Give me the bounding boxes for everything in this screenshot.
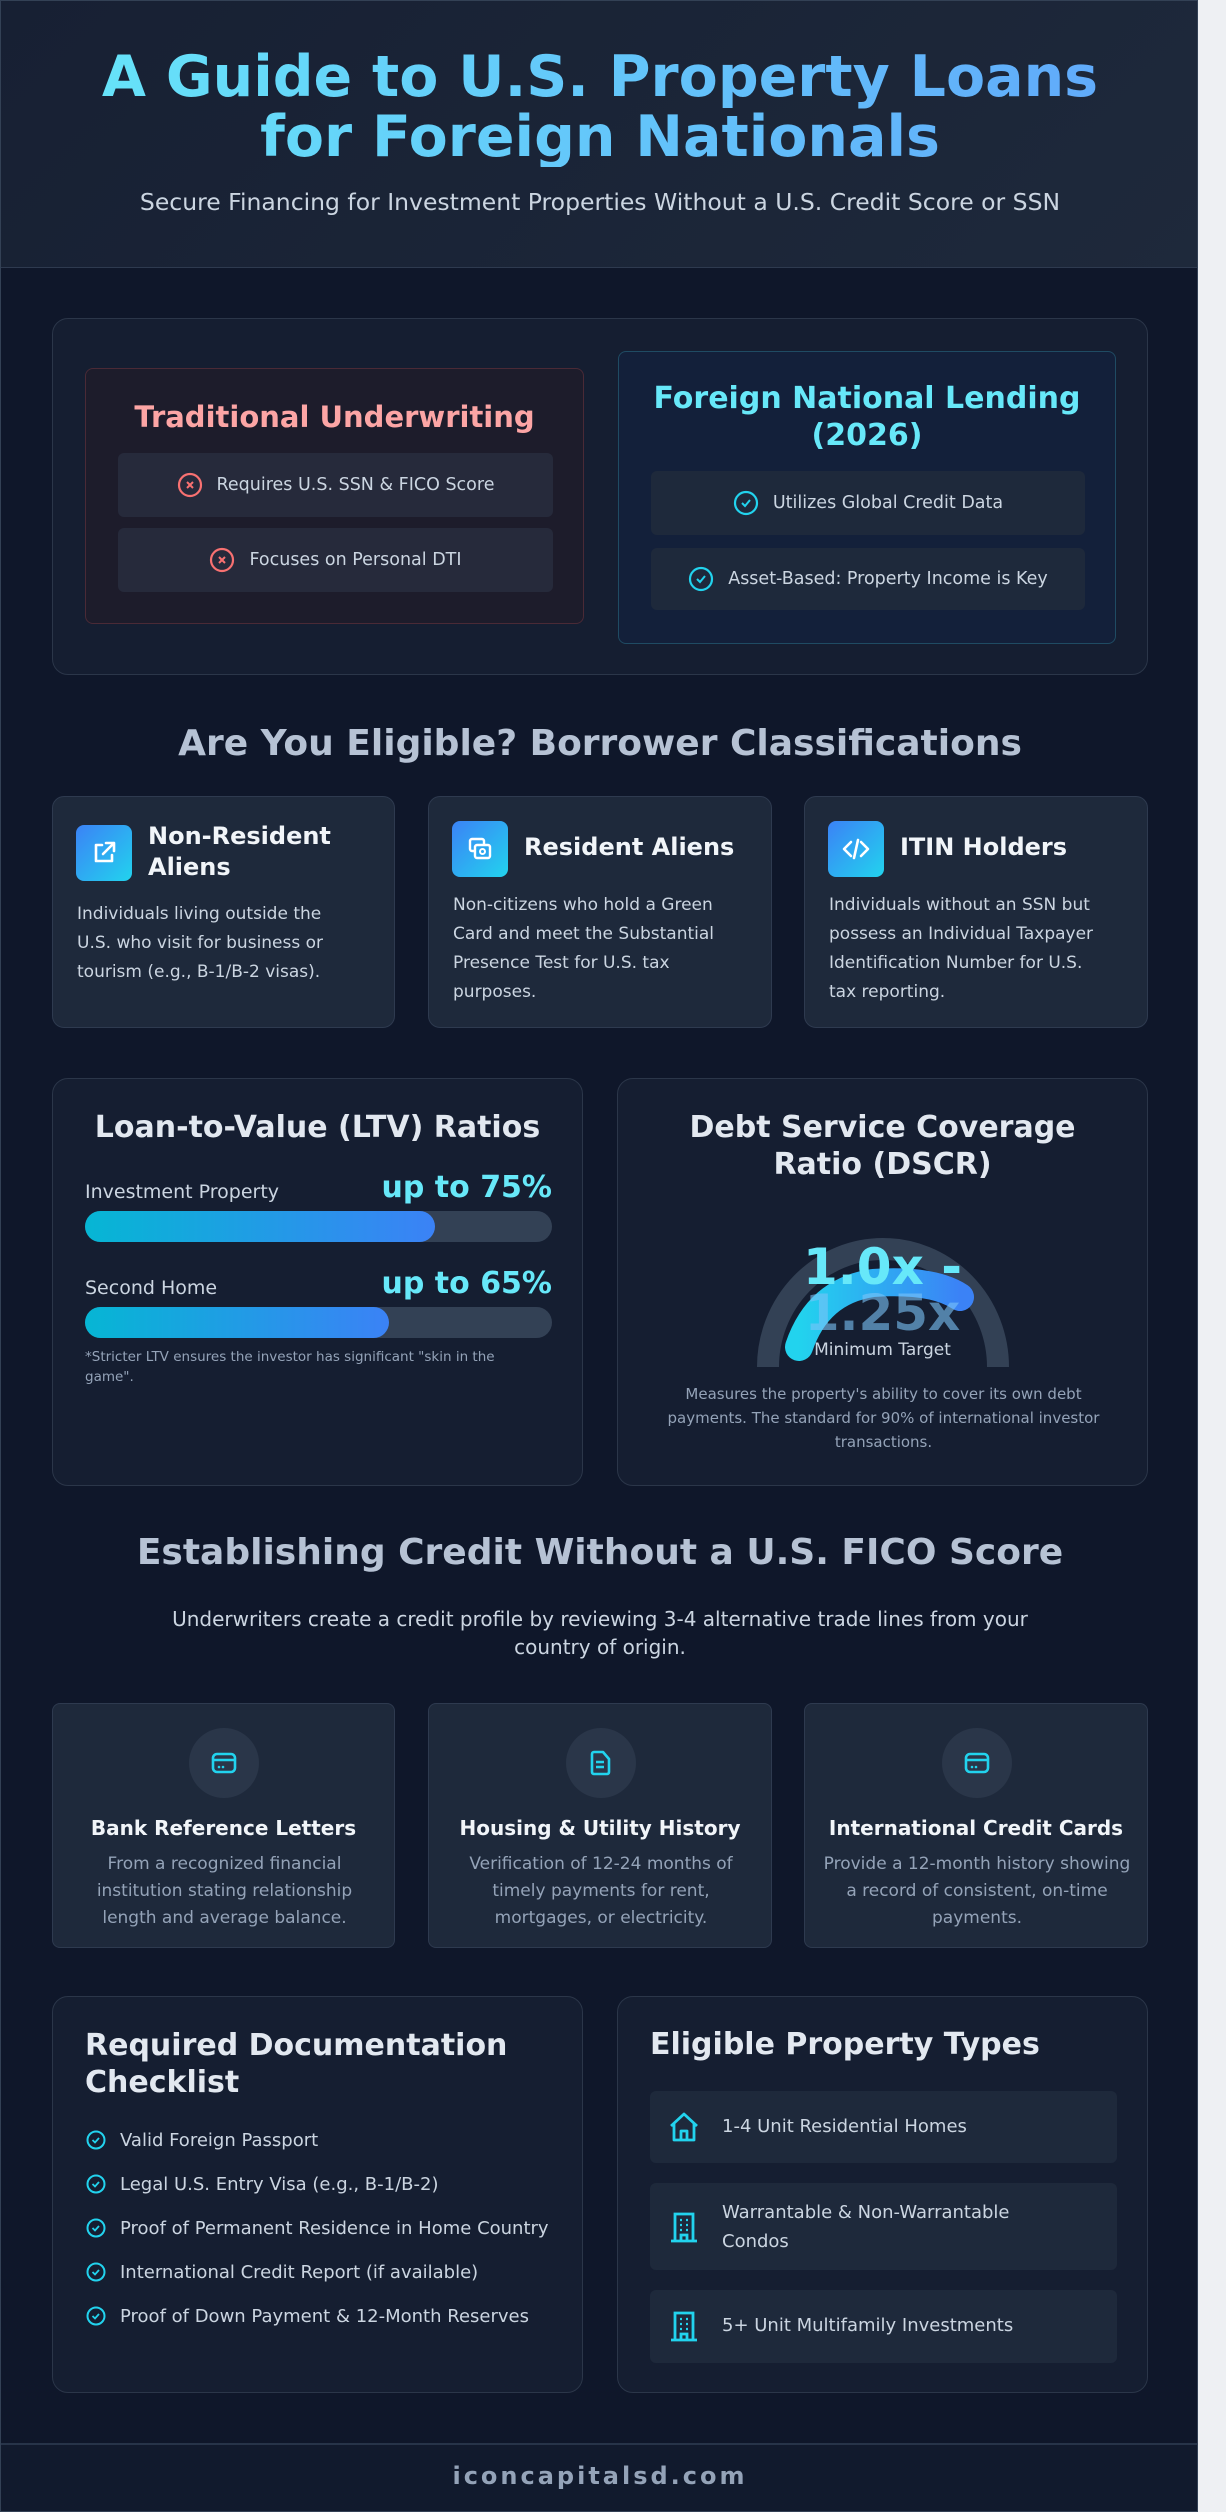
title: A Guide to U.S. Property Loans [102,44,1098,110]
checklist: Proof of Permanent Residence in Home Country [120,2218,549,2239]
item: condos [650,2183,1117,2270]
title: Non-Resident [148,822,331,850]
item [118,528,553,592]
title: ITIN Holders [900,833,1067,861]
description: Individuals without an SSN but possess an Individual Taxpayer Identification Number for U.S. tax reporting. [829,895,1093,1002]
bar: second home: up to 65% [382,1266,552,1301]
card: housing & utility [428,1703,772,1948]
card: non-resident aliens [52,796,395,1028]
title [1,47,1199,167]
item: Focuses on Personal DTI [249,550,462,570]
bar: investment property [85,1170,552,1242]
description: Provide a 12-month history showing a record of consistent, on-time payments. [824,1854,1130,1928]
checklist: Legal U.S. Entry Visa (e.g., B-1/B-2) [120,2174,438,2195]
subtitle: Secure Financing for Investment Properties Without a U.S. Credit Score or SSN [140,188,1060,216]
heading: Ratio (DSCR) [773,1147,992,1182]
card: traditional underwriting [85,368,584,624]
item: Requires U.S. SSN & FICO Score [217,475,494,495]
title [148,822,331,881]
heading: Debt Service Coverage [689,1110,1076,1145]
bar: investment property: up to 75% [382,1170,552,1205]
heading: Foreign National Lending [654,381,1080,416]
heading [689,1110,1076,1182]
title: Bank Reference Letters [91,1816,356,1840]
caption: Minimum Target [814,1340,951,1360]
heading: Loan-to-Value (LTV) Ratios [95,1110,540,1145]
card: international credit cards [804,1703,1148,1948]
heading [654,381,1080,453]
panel: comparison [52,318,1148,675]
footer [1,2443,1199,2512]
item: multifamily: 5+ Unit Multifamily Investments [722,2315,1013,2336]
heading: (2026) [812,418,922,453]
item [118,453,553,517]
description: Verification of 12-24 months of timely payments for rent, mortgages, or electricity. [469,1854,733,1928]
description: Non-citizens who hold a Green Card and meet the Substantial Presence Test for U.S. tax purposes. [453,895,714,1002]
checklist [86,2130,549,2327]
bar: second home: Second Home [85,1277,217,1299]
item: Asset-Based: Property Income is Key [728,569,1048,589]
heading [85,2028,507,2100]
item [651,548,1085,610]
heading: Eligible Property Types [650,2027,1040,2062]
card: itin holders [804,796,1148,1028]
note: *Stricter LTV ensures the investor has significant "skin in the game". [85,1349,495,1385]
checklist: International Credit Report (if available) [120,2262,478,2283]
bar: investment property: Investment Property [85,1181,279,1203]
checklist: Proof of Down Payment & 12-Month Reserves [120,2306,529,2327]
value: 1.0x - [803,1238,962,1296]
item: Utilizes Global Credit Data [773,493,1003,513]
icon [452,821,508,877]
checklist: Valid Foreign Passport [120,2130,318,2151]
description: From a recognized financial institution stating relationship length and average balance. [97,1854,352,1928]
gauge [757,1238,1009,1367]
value: 1.25x [805,1284,960,1342]
item: residential homes [650,2091,1117,2163]
card: bank reference letters [52,1703,395,1948]
panel: DSCR [617,1078,1148,1486]
title: Housing & Utility History [459,1816,741,1840]
item: multifamily [650,2290,1117,2363]
title: Aliens [148,853,231,881]
icon [189,1728,259,1798]
heading: eligibility: Are You Eligible? Borrower Classifications [178,723,1022,764]
item: residential homes: 1-4 Unit Residential Homes [722,2116,967,2137]
footer: iconcapitalsd.com [452,2462,748,2490]
value [803,1238,962,1342]
item: condos: Warrantable & Non-Warrantable Condos [722,2202,1010,2252]
icon [828,821,884,877]
icon [942,1728,1012,1798]
card: resident aliens [428,796,772,1028]
panel: eligible property types [617,1996,1148,2393]
panel: documentation checklist [52,1996,583,2393]
title: for Foreign Nationals [260,104,940,170]
heading: Traditional Underwriting [134,400,535,434]
panel: LTV ratios [52,1078,583,1486]
icon [566,1728,636,1798]
subtitle: credit: Underwriters create a credit profile by reviewing 3-4 alternative trade lines from your country of origin. [172,1607,1028,1659]
title: International Credit Cards [829,1816,1123,1840]
title: Resident Aliens [524,833,734,861]
item [651,471,1085,535]
description: Measures the property's ability to cover its own debt payments. The standard for 90% of international investor transactions. [668,1385,1099,1451]
description: Individuals living outside the U.S. who visit for business or tourism (e.g., B-1/B-2 visas). [77,904,323,982]
heading: Checklist [85,2065,239,2100]
bar: second home [85,1266,552,1338]
heading: Required Documentation [85,2028,507,2063]
header [1,1,1199,268]
heading: credit: Establishing Credit Without a U.S. FICO Score [137,1532,1063,1573]
icon [76,825,132,881]
card: foreign national lending [618,351,1116,644]
